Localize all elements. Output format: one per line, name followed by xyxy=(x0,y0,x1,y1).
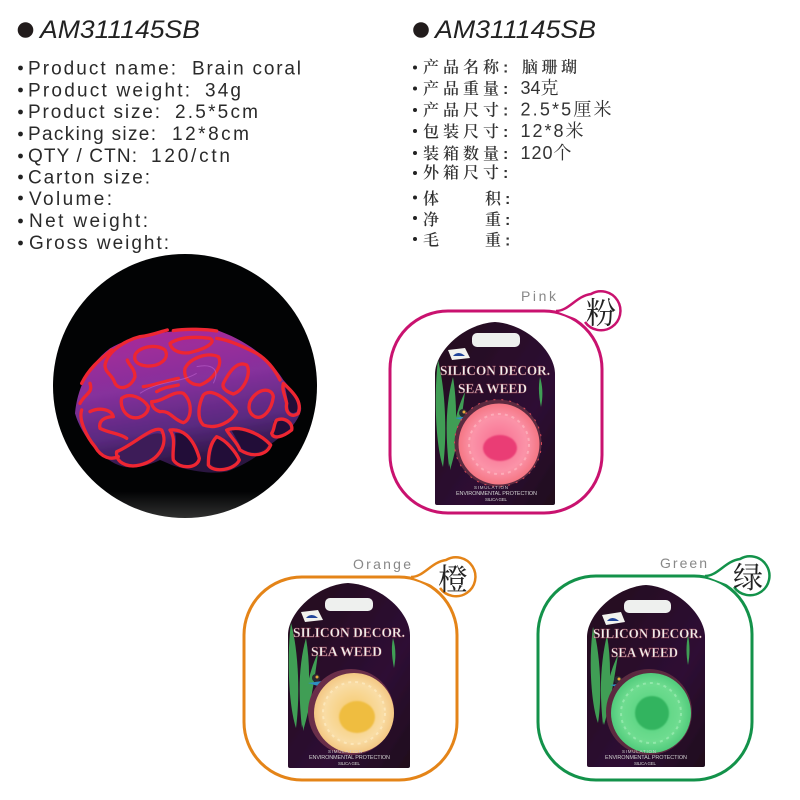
text block: Chinese specifications: 2.5*5厘米 xyxy=(520,100,612,120)
pink frame and colour callout: 粉 xyxy=(586,288,616,332)
pink product card: SILICON DECOR. xyxy=(440,363,550,378)
orange frame and colour callout xyxy=(244,555,475,780)
text block: English specifications: 2.5*5cm xyxy=(175,102,258,123)
green product card: ENVIRONMENTAL PROTECTION xyxy=(605,755,687,761)
text block: Chinese specifications: 脑珊瑚 xyxy=(522,58,581,76)
text block: Chinese specifications: 包装尺寸: xyxy=(423,123,512,141)
text block: Chinese specifications: 净 xyxy=(423,210,439,229)
green frame and colour callout xyxy=(538,553,769,780)
pink product card: SEA WEED xyxy=(458,381,527,396)
orange product card: ENVIRONMENTAL PROTECTION xyxy=(309,755,390,761)
text block: Chinese specifications: 积: xyxy=(485,190,514,208)
green product card: SIMULATION xyxy=(622,749,656,754)
icon: bird xyxy=(610,676,624,688)
text block: English specifications: Product size: xyxy=(28,102,160,123)
text block: Chinese specifications: 120个 xyxy=(520,143,572,163)
text block: English specifications: 120/ctn xyxy=(151,146,230,167)
text block: English specifications: Gross weight: xyxy=(29,233,169,254)
text block: English specifications: Product name: xyxy=(28,58,176,80)
text block: English specifications: Volume: xyxy=(29,189,112,210)
pink product card xyxy=(435,322,555,505)
text block: English specifications: QTY / CTN: xyxy=(28,146,137,167)
orange frame and colour callout: 橙 xyxy=(438,555,468,599)
text block: Chinese specifications: 装箱数量: xyxy=(423,144,512,163)
green product card: SEA WEED xyxy=(611,645,678,660)
text block: Chinese specifications: 34克 xyxy=(520,78,559,98)
text block: Chinese specifications: 重: xyxy=(485,232,514,250)
green product card: SILICA GEL xyxy=(634,761,656,766)
orange product card: SEA WEED xyxy=(311,644,382,659)
text block: English specifications: Brain coral xyxy=(192,58,301,80)
text block: Chinese specifications: 产品重量: xyxy=(423,79,512,98)
orange product card: SILICON DECOR. xyxy=(293,625,405,640)
pink product card: SILICA GEL xyxy=(485,497,507,502)
panel: orange variant xyxy=(244,555,475,780)
text block: English specifications xyxy=(18,58,301,254)
text block: Chinese specifications: 12*8米 xyxy=(520,121,584,141)
heading: Chinese column model number: AM311145SB xyxy=(433,16,596,44)
orange frame and colour callout: Orange xyxy=(353,556,411,572)
text block: English specifications: Carton size: xyxy=(28,168,150,188)
green product card: SILICON DECOR. xyxy=(593,626,702,641)
orange product card xyxy=(288,583,410,768)
orange product card: SILICA GEL xyxy=(338,761,360,766)
text block: English specifications: Packing size: xyxy=(28,124,156,145)
text block: Chinese specifications: 产品尺寸: xyxy=(423,100,512,120)
pink product card: SIMULATION xyxy=(474,485,508,490)
icon: bird xyxy=(455,409,469,421)
text block: Chinese specifications xyxy=(413,58,612,250)
pink frame and colour callout: Pink xyxy=(521,288,557,304)
icon: bird xyxy=(308,674,322,686)
panel: green variant xyxy=(538,553,769,780)
product photo: glowing brain coral on black circle xyxy=(53,254,317,518)
pink product card: ENVIRONMENTAL PROTECTION xyxy=(456,491,537,497)
text block: English specifications: 12*8cm xyxy=(172,124,249,145)
green frame and colour callout: 绿 xyxy=(733,553,763,597)
text block: Chinese specifications: 产品名称: xyxy=(423,58,512,76)
green frame and colour callout: Green xyxy=(660,555,707,571)
orange product card: SIMULATION xyxy=(328,749,362,754)
text block: Chinese specifications: 毛 xyxy=(423,232,439,250)
pink frame and colour callout xyxy=(390,288,620,513)
text block: English specifications: Product weight: xyxy=(28,80,190,102)
text block: Chinese specifications: 体 xyxy=(423,190,439,208)
text block: Chinese specifications: 外箱尺寸: xyxy=(423,164,512,182)
green product card xyxy=(587,585,705,767)
panel: pink variant xyxy=(390,288,620,513)
text block: English specifications: 34g xyxy=(205,80,241,102)
heading: English model number: AM311145SB xyxy=(38,16,200,44)
text block: English specifications: Net weight: xyxy=(29,211,148,232)
text block: Chinese specifications: 重: xyxy=(485,211,514,229)
